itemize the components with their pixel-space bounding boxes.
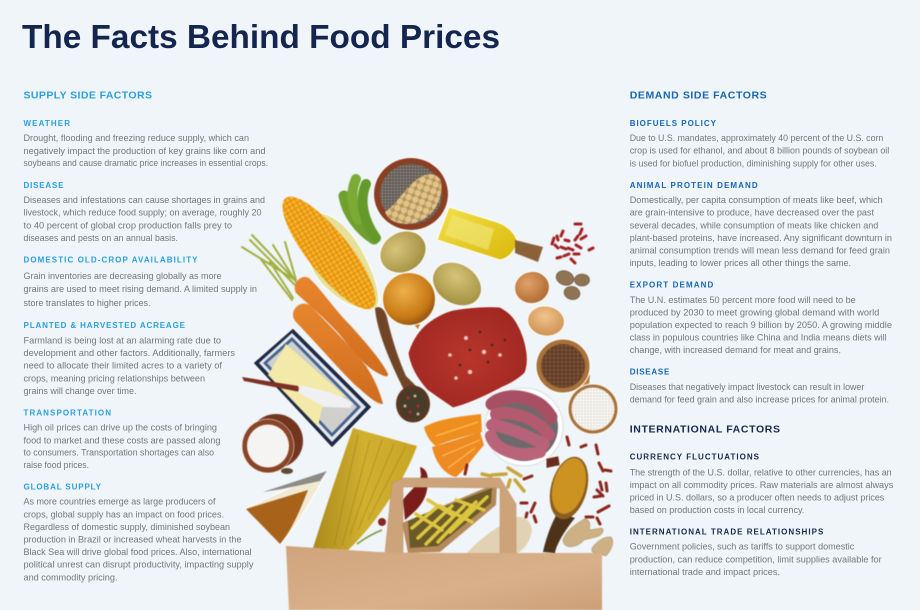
text block: weather bbox=[24, 119, 268, 168]
icon: plate of sausages bbox=[485, 388, 563, 466]
icon: salmon fillets bbox=[424, 414, 484, 477]
tray of penne pasta bbox=[402, 483, 497, 553]
icon: butter dish and knife bbox=[242, 328, 372, 448]
text block: currency fluctuations: priced in U.S. dollars, so a producer often needs to adjust prices bbox=[630, 491, 885, 502]
text block: biofuels policy: Due to U.S. mandates, approximately 40 percent of the U.S. corn bbox=[630, 132, 883, 143]
text block: biofuels policy: is used for biofuel production, diminishing supply for other uses. bbox=[630, 157, 877, 168]
text block: animal protein demand: several decades, while consumption of meats like chicken and bbox=[630, 219, 878, 230]
text block: transportation bbox=[24, 408, 220, 470]
icon: nutmeg seeds bbox=[554, 268, 590, 301]
text block: export demand: EXPORT DEMAND bbox=[630, 280, 714, 289]
icon: tan egg bbox=[526, 304, 566, 338]
text block: disease: DISEASE bbox=[24, 181, 64, 190]
icon: potato bbox=[372, 223, 434, 281]
text block: planted and harvested acreage: grains will change over time. bbox=[24, 385, 136, 396]
text block: disease: Diseases and infestations can cause shortages in grains and bbox=[24, 194, 265, 205]
text block: biofuels policy: BIOFUELS POLICY bbox=[630, 119, 717, 128]
text block: international trade relationships: Government policies, such as tariffs to support domestic bbox=[630, 541, 855, 552]
text block: planted and harvested acreage: crops, meaning pricing relationships between bbox=[24, 372, 205, 383]
icon: scattered penne bbox=[482, 468, 524, 491]
icon: double wooden spice bowl bbox=[536, 339, 618, 434]
text block: international trade relationships: international trade and impact prices. bbox=[630, 566, 780, 577]
icon: red chili pepper bbox=[357, 467, 428, 544]
text block: export demand: population expected to reach 9 billion by 2050. A growing middle bbox=[630, 319, 892, 330]
text block: animal protein demand: inputs, leading to lower prices all other things the same. bbox=[630, 257, 851, 268]
text block: global supply: Regardless of domestic supply, diminished soybean bbox=[24, 521, 230, 532]
text block: export demand: class in populous countries like China and India means diets will bbox=[630, 331, 887, 342]
icon: carrots with green tops bbox=[242, 235, 388, 404]
text block: global supply: GLOBAL SUPPLY bbox=[24, 483, 102, 492]
icon: cup of milk bbox=[242, 414, 303, 474]
icon: bowl of peppercorns and chickpeas bbox=[373, 157, 449, 231]
text block: domestic old-crop availability: grains are used to meet rising demand. A limited supply in bbox=[24, 283, 257, 294]
icon: wooden spoon with peppercorns bbox=[375, 307, 430, 422]
icon: scattered goji berries bbox=[552, 224, 593, 263]
text block: currency fluctuations: CURRENCY FLUCTUATIONS bbox=[630, 453, 760, 462]
text block: planted and harvested acreage: need to allocate their limited acres to a variety of bbox=[24, 360, 222, 371]
text block: global supply: and commodity pricing. bbox=[24, 571, 118, 582]
icon: green pea pods bbox=[344, 179, 376, 239]
text block: export demand: The U.N. estimates 50 percent more food will need to be bbox=[630, 294, 856, 305]
text block: transportation: High oil prices can drive up the costs of bringing bbox=[24, 422, 217, 433]
text block: currency fluctuations: The strength of the U.S. dollar, relative to other currencies, has an bbox=[630, 466, 892, 477]
panel: demand side factors bbox=[630, 90, 892, 404]
text block: transportation: raise food prices. bbox=[24, 459, 89, 470]
text block: disease bbox=[630, 367, 889, 404]
text block: currency fluctuations bbox=[630, 453, 894, 515]
icon: paper bag with pasta tray bbox=[286, 478, 602, 610]
icon: scattered dried chilies bbox=[465, 437, 611, 524]
text block: international trade relationships: production, can reduce competition, limit supplies available for bbox=[630, 553, 882, 564]
icon: red meat with pepper bbox=[408, 307, 527, 408]
text block: animal protein demand: ANIMAL PROTEIN DEMAND bbox=[630, 181, 758, 190]
text block: disease: diseases and pests on an annual basis. bbox=[24, 232, 178, 243]
text block: export demand: change, with increased demand for meat and grains. bbox=[630, 344, 841, 355]
heading: international factors: INTERNATIONAL FACTORS bbox=[630, 423, 780, 435]
text block: planted and harvested acreage: development and other factors. Additionally, farmers bbox=[24, 347, 235, 358]
icon: onion bbox=[382, 272, 436, 329]
text block: domestic old-crop availability: store translates to higher prices. bbox=[24, 297, 150, 308]
icon: olive oil bottle bbox=[437, 207, 543, 262]
icon: bundle of spaghetti bbox=[313, 428, 417, 550]
text block: disease: livestock, which reduce food supply; on average, roughly 20 bbox=[24, 207, 262, 218]
icon: ear of corn bbox=[269, 185, 389, 321]
icon: wedge of cheese bbox=[246, 471, 327, 544]
text block: planted and harvested acreage: PLANTED & HARVESTED ACREAGE bbox=[24, 321, 186, 330]
icon: banana-like root bbox=[467, 517, 532, 554]
text block: transportation: to consumers. Transportation shortages can also bbox=[24, 446, 214, 457]
text block: disease: Diseases that negatively impact livestock can result in lower bbox=[630, 381, 864, 392]
text block: biofuels policy: crop is used for ethanol, and about 8 billion pounds of soybean oil bbox=[630, 145, 889, 156]
text block: global supply: Black Sea will drive global food prices. Also, international bbox=[24, 546, 252, 557]
text block: weather: Drought, flooding and freezing reduce supply, which can bbox=[24, 132, 249, 143]
text block: domestic old-crop availability: Grain inventories are decreasing globally as more bbox=[24, 270, 222, 281]
text block: global supply: crops, global supply has an impact on food prices. bbox=[24, 508, 224, 519]
heading: supply side factors: SUPPLY SIDE FACTORS bbox=[24, 90, 152, 102]
text block: weather: soybeans and cause dramatic price increases in essential crops. bbox=[24, 157, 268, 168]
icon: brown egg bbox=[512, 269, 552, 306]
text block: planted and harvested acreage: Farmland is being lost at an alarming rate due to bbox=[24, 334, 221, 345]
text block: transportation: food to market and these costs are passed along bbox=[24, 434, 220, 445]
text block: biofuels policy bbox=[630, 119, 889, 168]
illustration: food spilling from paper bag bbox=[242, 157, 618, 610]
text block: weather: negatively impact the production of key grains like corn and bbox=[24, 145, 266, 156]
title: The Facts Behind Food Prices bbox=[22, 19, 500, 56]
text block: domestic old-crop availability: DOMESTIC OLD-CROP AVAILABILITY bbox=[24, 255, 198, 264]
heading: demand side factors: DEMAND SIDE FACTORS bbox=[630, 90, 767, 102]
text block: animal protein demand bbox=[630, 181, 892, 268]
panel: international factors bbox=[630, 423, 894, 577]
text block: global supply: As more countries emerge as large producers of bbox=[24, 496, 216, 507]
panel: supply side factors bbox=[24, 90, 268, 582]
icon: potato bbox=[424, 253, 490, 315]
text block: disease: DISEASE bbox=[630, 367, 670, 376]
text block: global supply: production in Brazil or increased wheat harvests in the bbox=[24, 533, 242, 544]
text block: disease bbox=[24, 181, 265, 243]
bag body bbox=[286, 546, 602, 610]
icon: ginger root bbox=[563, 519, 613, 556]
text block: global supply: political unrest can disrupt productivity, impacting supply bbox=[24, 559, 254, 570]
text block: animal protein demand: animal consumption trends will mean less demand for feed grain bbox=[630, 245, 890, 256]
text block: animal protein demand: Domestically, per capita consumption of meats like beef, which bbox=[630, 194, 883, 205]
text block: weather: WEATHER bbox=[24, 119, 70, 128]
text block: disease: demand for feed grain and also increase prices for animal protein. bbox=[630, 393, 889, 404]
text block: export demand bbox=[630, 280, 892, 355]
text block: currency fluctuations: impact on all commodity prices. Raw materials are almost always bbox=[630, 479, 894, 490]
text block: domestic old-crop availability bbox=[24, 255, 257, 308]
text block: planted and harvested acreage bbox=[24, 321, 235, 396]
text block: transportation: TRANSPORTATION bbox=[24, 408, 111, 417]
icon: turmeric spoon bbox=[543, 452, 595, 553]
text block: international trade relationships: INTERNATIONAL TRADE RELATIONSHIPS bbox=[630, 527, 824, 536]
text block: currency fluctuations: based on production costs in local currency. bbox=[630, 504, 804, 515]
text block: export demand: produced by 2030 to meet growing global demand with world bbox=[630, 306, 879, 317]
text block: global supply bbox=[24, 483, 254, 582]
text block: animal protein demand: are grain-intensive to produce, have decreased over the past bbox=[630, 207, 874, 218]
bag handle bbox=[385, 478, 516, 555]
text block: international trade relationships bbox=[630, 527, 882, 577]
text block: disease: to 40 percent of global crop production falls prey to bbox=[24, 219, 232, 230]
text block: animal protein demand: plant-based proteins, have increased. Any significant downturn in bbox=[630, 232, 892, 243]
